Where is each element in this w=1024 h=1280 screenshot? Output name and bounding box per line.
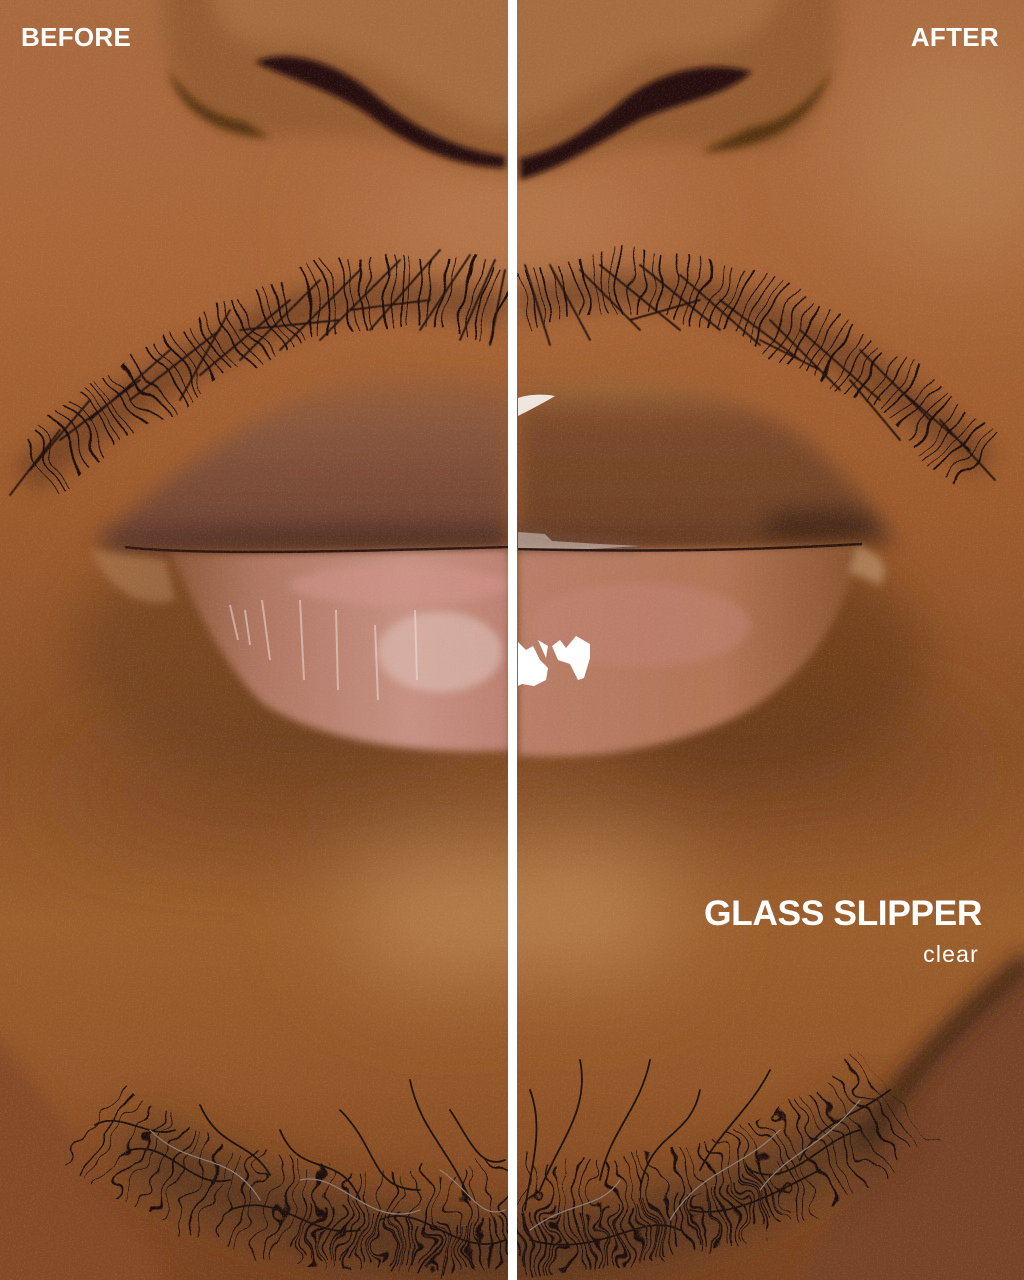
nose [163,0,838,180]
chin beard [95,1060,895,1250]
moustache [10,250,995,495]
product shade name: GLASS SLIPPER [704,893,982,933]
lips: right (after) [518,379,930,775]
divider line [508,0,517,1280]
jaw and neck shadows [0,950,1024,1280]
label: after: AFTER [911,22,999,52]
label: before: BEFORE [21,22,131,52]
product shade descriptor: clear [923,941,979,967]
lips: left (before) [70,374,530,775]
lip gloss highlights [518,395,640,686]
